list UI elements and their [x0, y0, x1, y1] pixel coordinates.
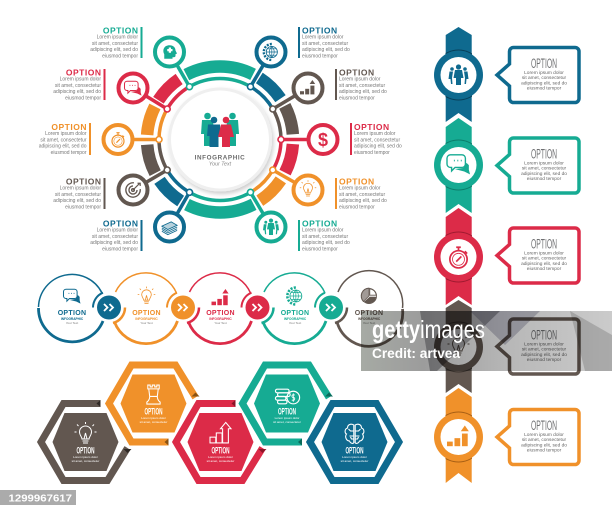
- label: teal upper left: adipiscing elit, sed do: [90, 47, 138, 53]
- label: orange left: [39, 122, 91, 156]
- callout orange: adipiscing elit, sed do: [521, 442, 567, 448]
- step 5 brown: OPTION: [355, 310, 383, 317]
- step 4 teal: OPTION: [281, 310, 309, 317]
- circle process row: [38, 271, 403, 346]
- callout brown: Lorem ipsum dolor: [524, 342, 564, 348]
- hexagon chain: [41, 365, 399, 480]
- icon circle: people: [256, 212, 286, 242]
- icon circle: dollar: [308, 125, 338, 154]
- label: teal lower right: [298, 218, 350, 252]
- label: blue lower left: sit amet, consectetur: [92, 234, 138, 240]
- label: teal lower right: sit amet, consectetur: [302, 234, 348, 240]
- ribbon segment blue: [446, 27, 472, 122]
- callout blue: OPTION: [531, 56, 557, 71]
- callout orange: Lorem ipsum dolor: [524, 432, 564, 438]
- hexagon teal: Lorem ipsum dolor: [275, 416, 299, 420]
- step 5 brown: [337, 271, 403, 346]
- medallion brown: [433, 322, 484, 372]
- nodes: [156, 84, 284, 195]
- label: teal upper left: sit amet, consectetur: [92, 41, 138, 47]
- image id tag: 1299967617: [8, 492, 72, 504]
- label: brown right: eiusmod tempor: [339, 96, 375, 102]
- icon circle: chart: [294, 74, 322, 102]
- label: red left: sit amet, consectetur: [55, 83, 101, 89]
- callout blue: eiusmod tempor: [527, 86, 562, 92]
- label: orange right: OPTION: [339, 176, 375, 186]
- medallion red: [433, 232, 484, 282]
- step 5 brown: INFOGRAPHIC: [358, 317, 381, 321]
- callout red: eiusmod tempor: [527, 266, 562, 272]
- thin arcs connecting the nodes: [137, 56, 303, 223]
- label: blue lower left: OPTION: [103, 218, 138, 228]
- watermark band: [361, 311, 612, 371]
- label: blue upper right: sit amet, consectetur: [302, 41, 348, 47]
- step 3 red: Your Text: [214, 321, 227, 325]
- step 4 teal: [263, 273, 326, 344]
- icon circle: head: [155, 38, 184, 66]
- label: brown left: Lorem ipsum dolor: [60, 186, 101, 192]
- image id tag: [0, 490, 76, 505]
- label: brown right: OPTION: [339, 68, 375, 78]
- watermark credit: Credit: artvea: [372, 346, 460, 361]
- label: brown left: eiusmod tempor: [65, 204, 101, 210]
- hexagon brown: [41, 400, 132, 480]
- icon circle: chat: [118, 74, 148, 102]
- label: orange right: adipiscing elit, sed do: [339, 198, 387, 204]
- callout brown: OPTION: [531, 328, 557, 342]
- hexagon red: [176, 400, 266, 480]
- step 2 orange: Your Text: [140, 321, 153, 325]
- label: blue lower left: adipiscing elit, sed do: [90, 240, 138, 246]
- step 2 orange: [114, 273, 178, 344]
- callout teal: OPTION: [531, 146, 557, 162]
- hexagon orange: [109, 365, 200, 446]
- label: blue upper right: eiusmod tempor: [302, 54, 338, 60]
- icon circle: money: [155, 212, 184, 242]
- step 1 blue: OPTION: [58, 310, 86, 317]
- label: brown right: adipiscing elit, sed do: [339, 89, 387, 95]
- step 3 red: INFOGRAPHIC: [209, 317, 232, 321]
- label: brown left: sit amet, consectetur: [55, 192, 101, 198]
- step 1 blue: Your Text: [66, 321, 78, 325]
- hexagon blue: Lorem ipsum dolor: [342, 455, 367, 459]
- medallion orange: [433, 412, 484, 462]
- label: brown right: Lorem ipsum dolor: [339, 76, 381, 82]
- label: brown right: sit amet, consectetur: [339, 83, 385, 89]
- callout blue: [497, 48, 579, 102]
- hexagon brown: sit amet, consectetur: [72, 459, 99, 463]
- label: red right: adipiscing elit, sed do: [354, 144, 402, 150]
- hexagon teal: sit amet, consectetur: [273, 420, 301, 424]
- medallion teal: [433, 140, 484, 190]
- hexagon red: sit amet, consectetur: [207, 459, 234, 463]
- label: teal lower right: eiusmod tempor: [302, 246, 338, 252]
- hub title: INFOGRAPHIC: [195, 154, 245, 162]
- label: blue lower left: Lorem ipsum dolor: [97, 228, 138, 234]
- stems from icons to nodes: [118, 52, 323, 227]
- callout orange: eiusmod tempor: [527, 448, 562, 454]
- callout brown: eiusmod tempor: [527, 357, 562, 363]
- label: teal lower right: OPTION: [302, 218, 338, 228]
- hexagon blue: OPTION: [345, 446, 364, 456]
- callout red: [497, 228, 579, 283]
- hexagon brown: Lorem ipsum dolor: [73, 455, 98, 459]
- callout blue: adipiscing elit, sed do: [521, 80, 567, 86]
- label: orange right: eiusmod tempor: [339, 204, 375, 210]
- callout teal: Lorem ipsum dolor: [524, 160, 564, 166]
- label: red right: sit amet, consectetur: [354, 138, 400, 144]
- hexagon blue: sit amet, consectetur: [341, 459, 368, 463]
- label: blue upper right: Lorem ipsum dolor: [302, 34, 344, 40]
- label: orange right: sit amet, consectetur: [339, 192, 385, 198]
- label: orange right: [335, 176, 387, 210]
- label: orange left: OPTION: [51, 122, 87, 132]
- callout blue: sit amet, consectetur: [522, 75, 567, 81]
- icon circle: stopwatch: [104, 125, 132, 154]
- label: brown left: [53, 176, 106, 210]
- callout teal: sit amet, consectetur: [522, 166, 567, 172]
- medallion blue: [433, 50, 484, 100]
- vertical ribbon timeline: [433, 27, 579, 483]
- step 3 red: OPTION: [206, 310, 235, 317]
- step 5 brown: Your Text: [363, 321, 375, 325]
- label: teal lower right: adipiscing elit, sed do: [302, 240, 350, 246]
- step 1 blue: INFOGRAPHIC: [61, 317, 84, 321]
- icon: team of people: [201, 113, 239, 147]
- callout red: sit amet, consectetur: [522, 256, 567, 262]
- callout red: OPTION: [531, 236, 557, 252]
- label: orange left: Lorem ipsum dolor: [45, 131, 87, 137]
- label: teal upper left: Lorem ipsum dolor: [97, 34, 138, 40]
- label: brown left: OPTION: [66, 176, 102, 186]
- label: red right: eiusmod tempor: [354, 150, 390, 156]
- label: red right: OPTION: [354, 122, 390, 132]
- label: blue lower left: eiusmod tempor: [102, 246, 138, 252]
- hexagon orange: Lorem ipsum dolor: [141, 416, 166, 420]
- label: blue upper right: OPTION: [302, 26, 338, 36]
- callout orange: OPTION: [531, 418, 557, 433]
- ribbon segment brown: [446, 300, 472, 393]
- step 2 orange: OPTION: [132, 310, 161, 317]
- label: blue upper right: [298, 26, 350, 60]
- step 4 teal: Your Text: [289, 321, 301, 325]
- callout blue: Lorem ipsum dolor: [524, 70, 564, 76]
- label: orange left: adipiscing elit, sed do: [39, 144, 87, 150]
- arrow: red connector: [242, 293, 274, 323]
- central circular diagram: [39, 26, 402, 252]
- label: orange right: Lorem ipsum dolor: [339, 186, 381, 192]
- callout teal: eiusmod tempor: [527, 176, 562, 182]
- hub subtitle: Your Text: [209, 162, 232, 168]
- step 1 blue: [38, 274, 103, 342]
- label: red left: Lorem ipsum dolor: [60, 76, 101, 82]
- label: teal upper left: OPTION: [103, 26, 138, 36]
- label: red right: [350, 122, 402, 156]
- hexagon teal: [242, 365, 333, 446]
- label: teal upper left: [90, 26, 142, 60]
- arrow: teal connector: [315, 293, 347, 323]
- callout brown: sit amet, consectetur: [522, 346, 567, 352]
- arrow: orange connector: [167, 293, 199, 323]
- label: teal upper left: eiusmod tempor: [102, 54, 138, 60]
- icon circle: light bulb: [294, 176, 322, 204]
- label: teal lower right: Lorem ipsum dolor: [302, 228, 344, 234]
- label: blue lower left: [90, 218, 142, 252]
- ribbon segment teal: [446, 118, 472, 213]
- hexagon orange: sit amet, consectetur: [140, 420, 167, 424]
- thick arc segments around the hub: [119, 38, 321, 241]
- label: red left: eiusmod tempor: [65, 96, 101, 102]
- callout brown: adipiscing elit, sed do: [521, 352, 567, 358]
- label: red left: [53, 68, 106, 102]
- label: blue upper right: adipiscing elit, sed do: [302, 47, 350, 53]
- hexagon brown: OPTION: [76, 446, 95, 456]
- arrow: blue connector: [93, 293, 125, 323]
- label: red left: adipiscing elit, sed do: [53, 89, 101, 95]
- callout red: adipiscing elit, sed do: [521, 261, 567, 267]
- ribbon segment orange: [446, 388, 472, 483]
- label: brown left: adipiscing elit, sed do: [53, 198, 101, 204]
- watermark brand: gettyimages: [372, 316, 485, 344]
- hexagon red: Lorem ipsum dolor: [208, 455, 233, 459]
- icon circle: target: [118, 176, 148, 204]
- callout teal: [497, 138, 579, 193]
- label: red left: OPTION: [66, 68, 102, 78]
- hexagon red: OPTION: [211, 446, 230, 456]
- label: orange left: sit amet, consectetur: [40, 138, 87, 144]
- step 2 orange: INFOGRAPHIC: [135, 317, 158, 321]
- step 4 teal: INFOGRAPHIC: [284, 317, 307, 321]
- hexagon blue: [310, 404, 399, 480]
- hexagon teal: OPTION: [278, 406, 296, 416]
- callout brown: [497, 319, 579, 374]
- callout teal: adipiscing elit, sed do: [521, 171, 567, 177]
- hexagon orange: OPTION: [144, 406, 163, 416]
- callout orange: sit amet, consectetur: [522, 437, 567, 443]
- callout red: Lorem ipsum dolor: [524, 250, 564, 256]
- label: red right: Lorem ipsum dolor: [354, 131, 396, 137]
- icon circle: dollar: $: [318, 130, 328, 150]
- icon circle: globe: [256, 38, 286, 66]
- central hub: [170, 89, 270, 190]
- callout orange: [497, 410, 579, 464]
- label: brown right: [335, 68, 387, 102]
- label: orange left: eiusmod tempor: [51, 150, 87, 156]
- ribbon segment red: [446, 208, 472, 305]
- step 3 red: [188, 273, 252, 344]
